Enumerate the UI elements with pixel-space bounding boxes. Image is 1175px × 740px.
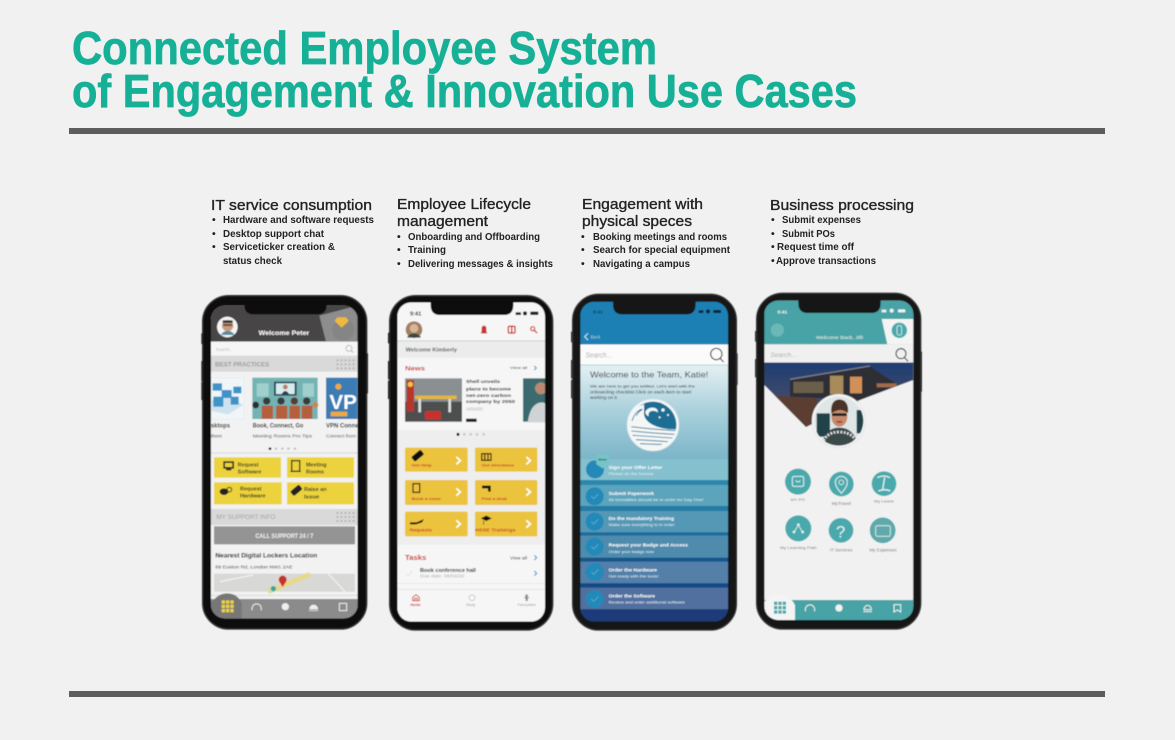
checklist rows	[580, 454, 728, 622]
search bar: Search...	[770, 352, 797, 359]
text block: Business processing: Submit expenses	[782, 214, 861, 226]
yellow action tiles: Book a room	[412, 496, 441, 501]
text block: Business processing: Request time off	[777, 241, 854, 253]
icon: my expenses: My Expenses	[869, 547, 897, 552]
bottom tabs: Study	[466, 603, 476, 607]
header: 9:41	[777, 309, 788, 315]
news section	[405, 365, 549, 422]
text: nearest digital lockers	[215, 552, 317, 570]
text block: Employee Lifecycle management: management	[397, 213, 489, 230]
tasks section: Book conference hall	[420, 568, 476, 574]
tasks section	[397, 555, 545, 589]
text block: Business processing: •	[771, 241, 775, 253]
text block: Employee Lifecycle management: Employee Lifecycle	[397, 196, 531, 213]
bottom navigation	[764, 599, 914, 621]
text block: Engagement with physical speces: Navigating a campus	[593, 258, 690, 270]
carousel cards: them	[211, 434, 222, 440]
checklist rows: Order the Software	[609, 594, 655, 599]
tasks section: Tasks	[405, 555, 426, 562]
carousel cards: VP	[329, 391, 357, 414]
checklist rows: Done!	[598, 458, 607, 462]
text block: Employee Lifecycle management: •	[397, 258, 401, 270]
carousel cards: Connect from	[326, 434, 356, 440]
yellow action buttons: Rooms	[306, 469, 324, 475]
text block: IT service consumption: Hardware and software requests	[223, 214, 374, 226]
text block: Employee Lifecycle management: Training	[408, 244, 446, 256]
text block: IT service consumption: Desktop support chat	[223, 228, 324, 240]
status and top icons: 9:41	[410, 311, 421, 317]
text block: Business processing: Approve transactions	[776, 255, 876, 267]
checklist rows: Sign your Offer Letter	[609, 465, 663, 470]
yellow action buttons: Request	[240, 487, 262, 493]
header: welcome bar: Welcome Peter	[259, 330, 310, 337]
carousel cards: sktops	[211, 423, 231, 429]
text block: IT service consumption	[211, 197, 374, 267]
tasks section: View all	[510, 555, 527, 560]
header: 9:41	[593, 309, 603, 315]
checklist rows: Request your Badge and Access	[609, 542, 688, 547]
news section: News	[405, 365, 426, 372]
button: call support	[214, 526, 355, 544]
news section: plans to become	[466, 386, 511, 392]
text block: Business processing: Business processing	[770, 197, 914, 214]
yellow action buttons: Meeting	[306, 463, 327, 469]
text block: Engagement with physical speces: Search for special equipment	[593, 244, 730, 256]
news section: net-zero carbon	[466, 393, 511, 399]
phone: onboarding app	[571, 294, 738, 630]
icon: my po: MY PO	[791, 497, 805, 502]
welcome text: working on it.	[590, 395, 618, 400]
text block: Business processing: •	[771, 228, 775, 240]
icon: my travel: MyTravel	[832, 501, 851, 506]
yellow action buttons: Raise an	[304, 487, 327, 493]
text block: Business processing: •	[771, 255, 775, 267]
button: call support: CALL SUPPORT 24 / 7	[255, 534, 314, 540]
yellow action buttons: Issue	[304, 494, 319, 500]
bottom tabs: Home	[410, 603, 421, 607]
text block: Engagement with physical speces: physical speces	[582, 213, 692, 230]
text block: Employee Lifecycle management	[397, 196, 553, 270]
welcome band: Welcome Kimberly	[406, 348, 458, 354]
bottom navigation	[211, 593, 358, 618]
text: nearest digital lockers: 69 Euston Rd, London NW1 2AE	[215, 564, 293, 570]
carousel cards: VPN Connect	[326, 423, 364, 429]
text block: IT service consumption: status check	[223, 255, 282, 267]
yellow action buttons: Request	[238, 463, 259, 469]
wave badge	[627, 399, 679, 451]
title	[72, 22, 857, 117]
checklist rows: Do the mandatory Training	[609, 516, 674, 521]
text block: Employee Lifecycle management: •	[397, 231, 401, 243]
yellow action buttons	[214, 457, 354, 504]
welcome text	[590, 370, 708, 400]
text block: Employee Lifecycle management: •	[397, 244, 401, 256]
icon: learning path: My Learning Path	[780, 545, 817, 550]
notch	[431, 302, 513, 315]
yellow action tiles	[405, 448, 537, 536]
notch	[798, 300, 881, 313]
yellow action tiles: Requests	[410, 527, 432, 533]
welcome band	[397, 341, 545, 358]
text block: IT service consumption: IT service consumption	[211, 197, 372, 214]
yellow action buttons: Software	[238, 469, 261, 475]
carousel cards: Book, Connect, Go	[253, 423, 304, 429]
welcome text: Welcome to the Team, Katie!	[590, 370, 708, 380]
checklist rows: Order your badge now	[609, 549, 654, 554]
bottom tabs	[410, 594, 536, 607]
text block: Business processing	[770, 197, 914, 267]
carousel cards	[211, 378, 364, 440]
search bar	[580, 344, 728, 365]
status and top icons	[406, 311, 538, 338]
checklist rows: All formalities should be in order for Day One!	[609, 497, 704, 502]
text block: Engagement with physical speces: Booking meetings and rooms	[593, 231, 727, 243]
news section: 16/04/20	[466, 407, 483, 412]
text block: Engagement with physical speces: •	[581, 258, 585, 270]
carousel dots	[269, 447, 296, 450]
text block: IT service consumption: •	[212, 241, 216, 253]
text block: Business processing: Submit POs	[782, 228, 835, 240]
carousel cards: Meeting Rooms Pro Tips	[253, 434, 313, 440]
band: my support info: MY SUPPORT INFO	[216, 515, 276, 521]
text block: Employee Lifecycle management: Delivering messages & insights	[408, 258, 553, 270]
carousel dots	[396, 430, 486, 545]
text block: IT service consumption: Serviceticker creation &	[223, 241, 335, 253]
phone: lifecycle app	[388, 296, 553, 630]
welcome text: We are here to get you settled. Let's start with the	[590, 384, 696, 389]
header: Back	[591, 334, 601, 339]
news section: Shell unveils	[466, 379, 500, 385]
search bar	[764, 344, 913, 362]
yellow action buttons: Hardware	[240, 493, 266, 499]
phone: IT service app	[201, 296, 368, 629]
search bar	[211, 342, 358, 356]
app icons	[780, 469, 897, 553]
text: nearest digital lockers: Nearest Digital Lockers Location	[215, 552, 317, 559]
yellow action tiles: Get Help	[412, 463, 432, 468]
icon: it services: ?	[836, 523, 845, 542]
notch	[613, 300, 696, 314]
text block: Engagement with physical speces: Engagement with	[582, 196, 703, 213]
phone: business processing app	[755, 293, 922, 629]
profile photo	[812, 394, 865, 448]
header: Welcome Back, Jill!	[816, 335, 863, 340]
text block: Engagement with physical speces	[581, 196, 730, 270]
band: best practices: BEST PRACTICES	[215, 362, 269, 369]
bottom tabs: Favourites	[518, 603, 536, 607]
yellow action tiles: Find a desk	[482, 496, 508, 501]
yellow action tiles: Get directions	[482, 463, 515, 468]
icon: it services	[829, 518, 853, 553]
checklist rows: Submit Paperwork	[609, 491, 654, 496]
checklist rows: Make sure everything is in order	[609, 522, 675, 527]
notch	[244, 302, 327, 314]
band: my support info	[211, 509, 358, 525]
title: of Engagement & Innovation Use Cases	[72, 65, 857, 117]
search bar: Search...	[585, 353, 612, 360]
news section: View all	[510, 365, 527, 370]
tasks section: Due date: 08/04/20	[420, 574, 465, 579]
checklist rows: Please do the honors	[609, 471, 653, 476]
checklist rows: Order the Hardware	[609, 568, 657, 573]
icon: my leave: My Leave	[874, 499, 895, 504]
yellow action tiles: HSSE Trainings	[475, 527, 516, 533]
header	[580, 302, 728, 344]
news section: company by 2050	[466, 399, 515, 405]
text block: Engagement with physical speces: •	[581, 244, 585, 256]
header: welcome bar	[211, 306, 358, 342]
band: best practices	[211, 356, 358, 372]
title: Connected Employee System	[72, 22, 657, 74]
text block: IT service consumption: •	[212, 214, 216, 226]
checklist rows: Get ready with the tools!	[609, 574, 659, 579]
search bar: Search...	[216, 347, 233, 352]
icon: it services: IT Services	[830, 548, 852, 553]
checklist rows: Review and order additional software	[609, 600, 686, 605]
text block: Employee Lifecycle management: Onboarding and Offboarding	[408, 231, 540, 243]
text block: Engagement with physical speces: •	[581, 231, 585, 243]
banner photo	[764, 362, 913, 429]
text block: Business processing: •	[771, 214, 775, 226]
welcome text: onboarding checklist Click on each item to start	[590, 390, 692, 395]
header	[764, 301, 913, 344]
map	[214, 574, 355, 592]
text block: IT service consumption: •	[212, 228, 216, 240]
